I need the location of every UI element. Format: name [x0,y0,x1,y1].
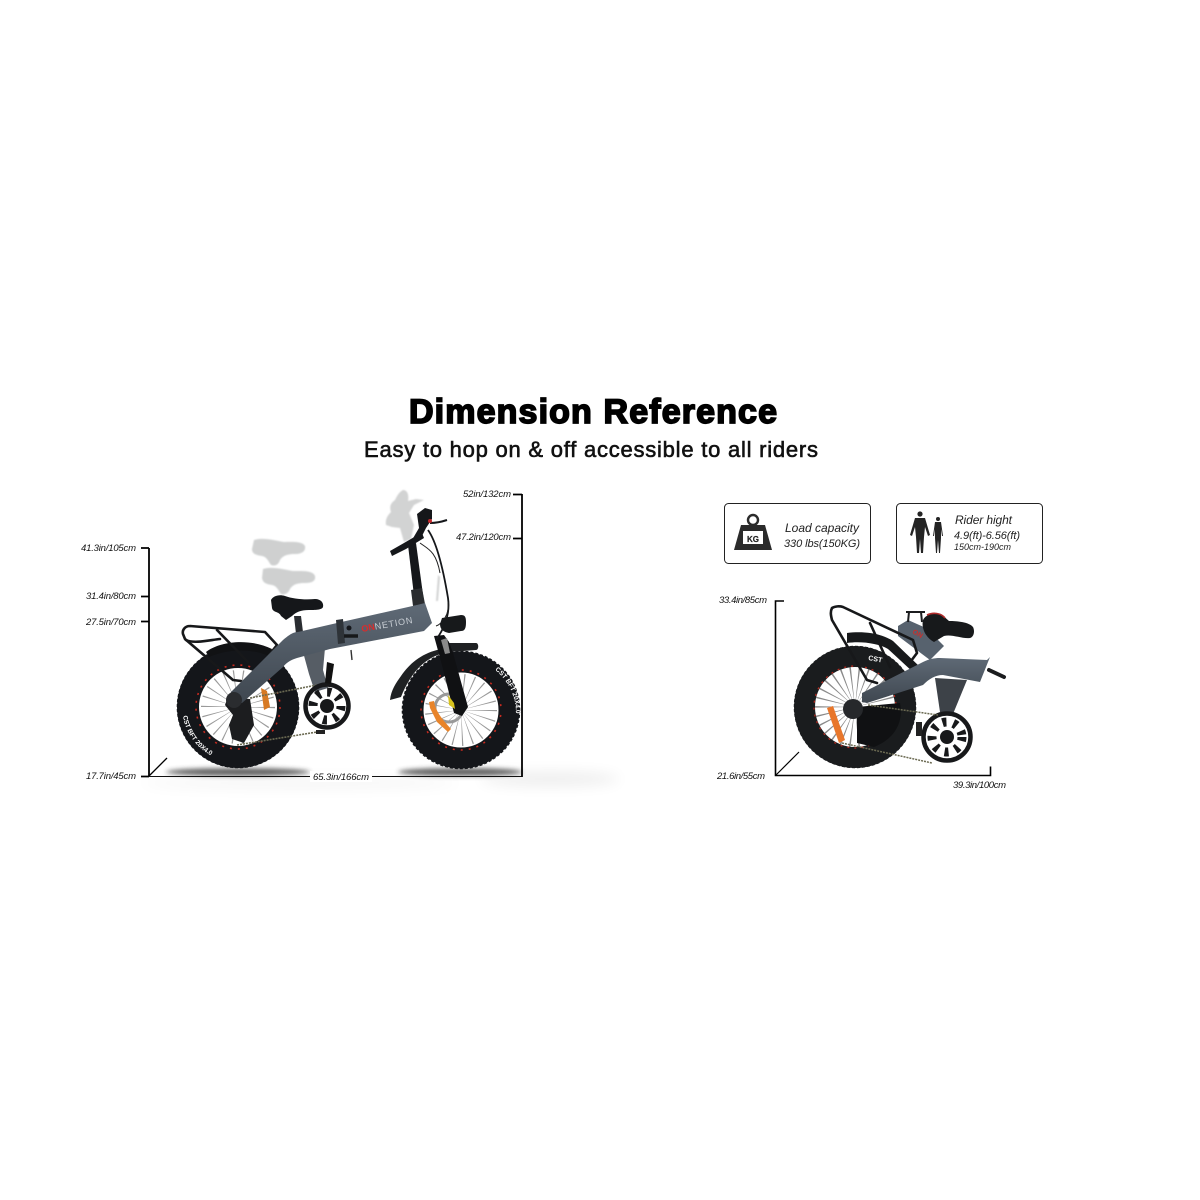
rider text: Rider hight [955,513,1013,527]
folded rear wheel: CST [868,655,883,665]
rider text: 4.9(ft)-6.56(ft) [954,530,1020,542]
headlight [440,615,466,633]
ghost seats [252,539,315,594]
folded labels: 21.6in/55cm [716,771,765,782]
load text [784,521,860,550]
front fork [434,635,468,716]
stem and handlebar [390,508,448,640]
folded labels [716,595,1006,791]
dimension labels: 41.3in/105cm [81,543,136,554]
frame logo: ONNETION [361,615,414,634]
baseline [149,776,522,778]
folded crank [842,678,970,763]
rider text [954,513,1020,552]
dimension labels [81,489,511,783]
height axis right [513,494,522,777]
panel: rider height [896,504,1042,564]
ghost handlebar [386,490,440,601]
dimension labels: 27.5in/70cm [85,617,136,628]
dimension labels: 65.3in/166cm [313,772,369,783]
folded seat and handle [898,612,974,660]
rear wheel [176,650,300,768]
folded seat and handle: ON [911,629,924,640]
panel: load capacity [724,504,870,564]
main frame [228,603,432,704]
load text: Load capacity [785,521,860,535]
seat [271,595,323,634]
rider text: 150cm-190cm [954,542,1012,552]
front wheel: CST BFT 20X4.0 [496,667,520,714]
rear fender [206,642,272,657]
dimension labels: 52in/132cm [463,489,511,500]
folded rack [831,606,917,683]
folded rear fender [847,632,920,673]
front fender [390,643,478,700]
load text: 330 lbs(150KG) [784,538,860,550]
icon: weight [734,515,772,550]
rear hub [226,692,242,708]
ground shadow [140,768,620,789]
title: Dimension Reference [409,393,777,431]
dimension labels: 17.7in/45cm [86,771,136,782]
panel: folded bike with dimensions [716,595,1006,791]
icon: weight: KG [747,535,759,544]
front wheel [402,650,520,770]
subtitle: Easy to hop on & off accessible to all riders [364,437,818,462]
folded frame [862,657,990,703]
rear derailleur and disc caliper [225,688,270,743]
folded rear wheel [794,646,925,768]
dimension labels: 31.4in/80cm [86,591,136,602]
rear wheel: CST BFT 20X4.0 [183,716,212,755]
panel: unfolded bike with dimensions [81,489,604,786]
kickstand and crank [237,648,348,745]
folding hinge [336,619,358,660]
height axis left [141,548,167,777]
folded labels: 33.4in/85cm [719,595,767,606]
dimension labels: 47.2in/120cm [456,532,511,543]
folded handle bar end [989,670,1004,677]
icon: riders [910,511,943,553]
folded labels: 39.3in/100cm [953,780,1006,791]
rear rack [183,626,277,681]
folded axes [776,601,990,776]
